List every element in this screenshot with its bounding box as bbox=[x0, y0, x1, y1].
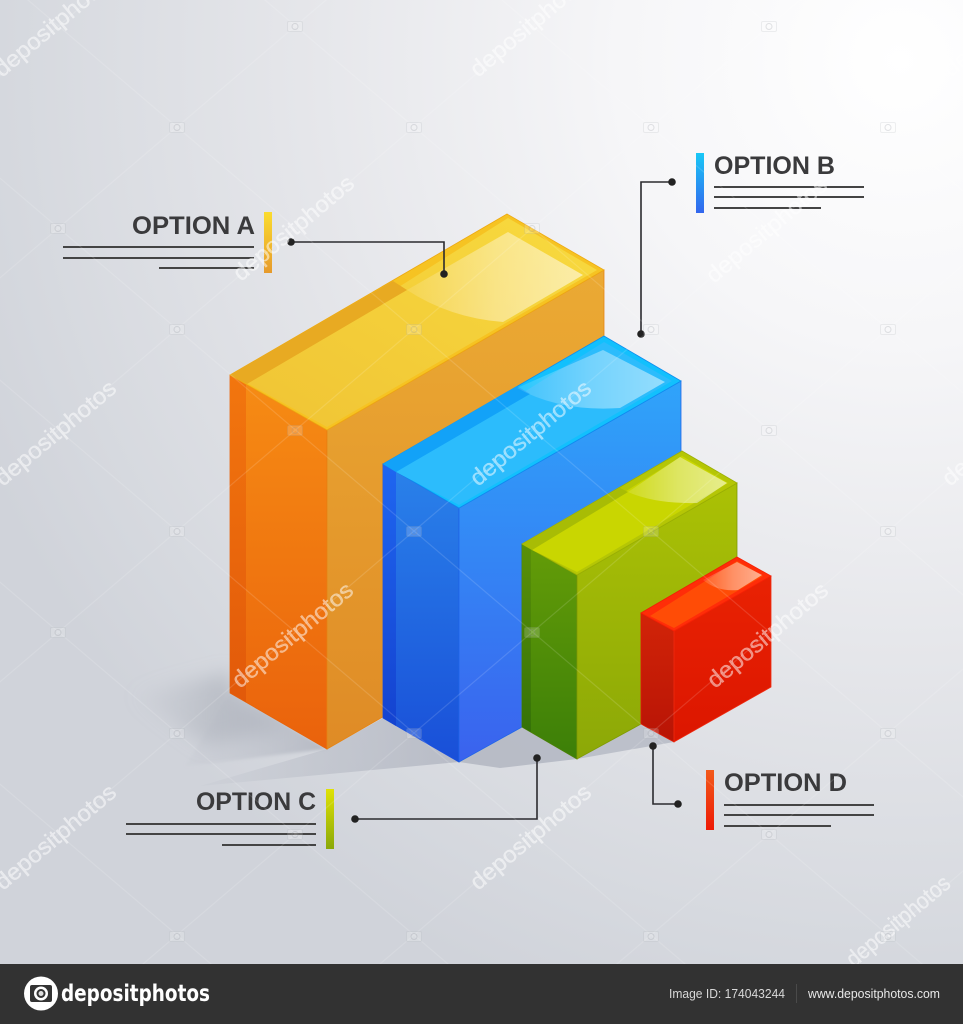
connector A bbox=[287, 238, 448, 278]
text lines bbox=[714, 186, 864, 209]
3D bar A: orange bbox=[230, 214, 604, 749]
colour bar bbox=[696, 153, 704, 213]
colour bar bbox=[264, 212, 272, 273]
top face bbox=[383, 336, 681, 508]
left face bbox=[383, 464, 459, 762]
3D bar C: green bbox=[522, 451, 737, 759]
watermark text: depositphotos bbox=[228, 169, 359, 286]
left face bbox=[230, 375, 327, 749]
3D bar D: red bbox=[641, 557, 771, 742]
connector C bbox=[351, 754, 541, 823]
colour bar bbox=[326, 789, 334, 849]
top highlight bbox=[628, 457, 727, 503]
right face bbox=[674, 576, 771, 742]
top highlight bbox=[407, 232, 583, 322]
label: option B bbox=[696, 152, 864, 213]
right face bbox=[459, 381, 681, 762]
image id: Image ID: 174043244 bbox=[669, 987, 785, 1001]
right face bbox=[327, 270, 604, 749]
heading: OPTION D bbox=[724, 769, 847, 797]
drop shadow bbox=[130, 672, 674, 786]
label: option A bbox=[63, 212, 272, 273]
heading: OPTION C bbox=[196, 788, 316, 816]
footer logo text: depositphotos bbox=[61, 981, 210, 1007]
watermark text: depositphotos bbox=[227, 576, 358, 693]
left face bbox=[641, 613, 674, 742]
watermark text: depositphotos bbox=[702, 576, 833, 693]
footer logo icon bbox=[24, 976, 58, 1010]
text lines bbox=[126, 823, 316, 846]
label: option D bbox=[706, 769, 874, 830]
text lines bbox=[63, 246, 254, 269]
left face bbox=[522, 544, 577, 759]
watermark text: depositphotos bbox=[465, 374, 596, 491]
top highlight bbox=[703, 562, 762, 590]
top face bbox=[522, 451, 737, 575]
heading: OPTION B bbox=[714, 152, 835, 180]
label: option C bbox=[126, 788, 334, 849]
right face bbox=[577, 483, 737, 759]
watermark text: depositphotos bbox=[465, 778, 596, 895]
watermark text: depositphotos bbox=[701, 171, 832, 288]
connector D bbox=[649, 742, 682, 808]
footer bar bbox=[0, 964, 963, 1024]
text lines bbox=[724, 804, 874, 827]
connector B bbox=[637, 178, 676, 338]
heading: OPTION A bbox=[132, 212, 255, 240]
watermark camera icons bbox=[50, 22, 896, 942]
top highlight bbox=[517, 350, 665, 409]
top face bbox=[641, 557, 771, 631]
colour bar bbox=[706, 770, 714, 830]
3D bar B: blue bbox=[383, 336, 681, 762]
website url: www.depositphotos.com bbox=[807, 987, 940, 1001]
top face bbox=[230, 214, 604, 430]
